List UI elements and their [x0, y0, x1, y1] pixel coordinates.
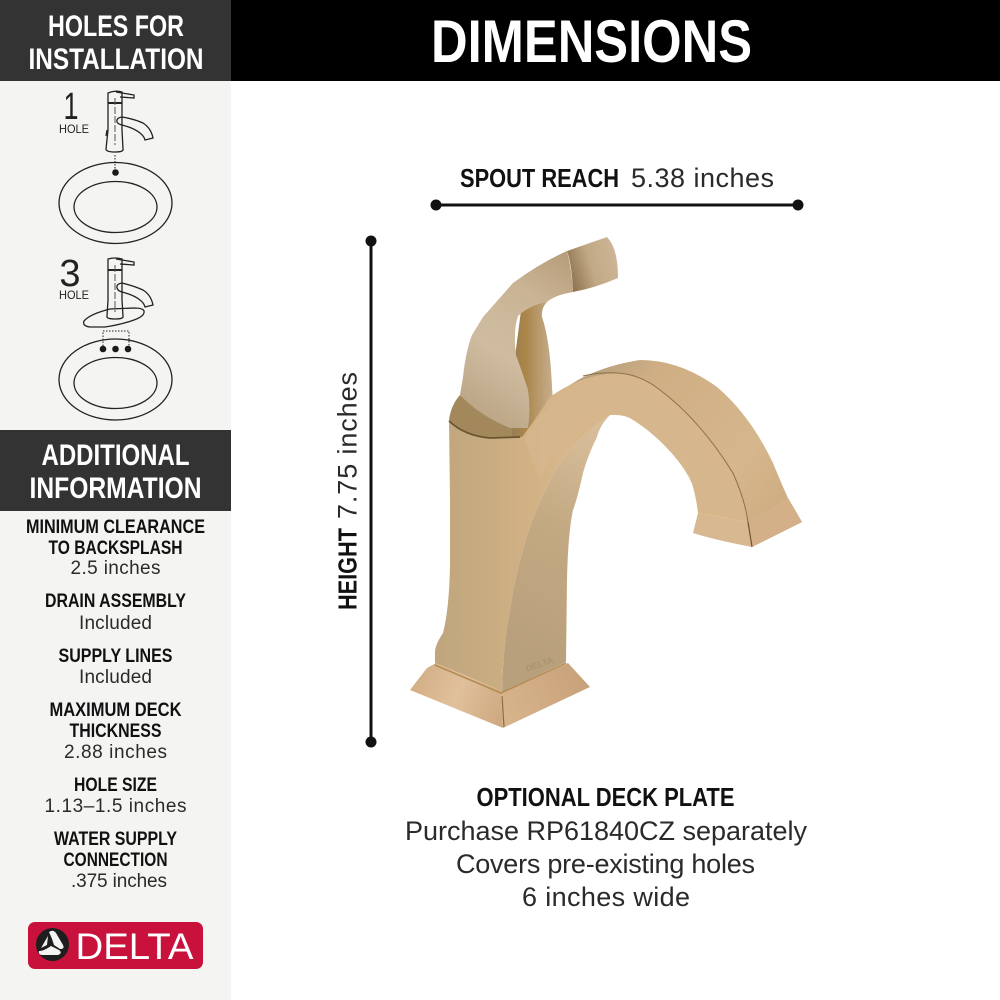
header: holes for installation	[0, 0, 231, 81]
header: holes for installation: HOLES FOR	[48, 10, 184, 43]
diagram: 3 hole	[59, 253, 172, 420]
icon: line faucet with deck plate	[84, 258, 153, 327]
header: additional information: INFORMATION	[30, 472, 202, 505]
dimension: spout reach: SPOUT REACH	[460, 163, 619, 193]
spec: water supply connection: CONNECTION	[64, 850, 168, 871]
logo: delta: DELTA	[76, 926, 194, 967]
header: dimensions: DIMENSIONS	[431, 8, 752, 75]
spec: minimum clearance	[26, 517, 205, 579]
spec: water supply connection: WATER SUPPLY	[54, 829, 177, 850]
spec: hole size	[44, 775, 186, 817]
icon: sink with one hole	[59, 155, 172, 244]
note: optional deck plate	[405, 782, 808, 912]
label: 1 hole	[59, 86, 89, 136]
dimension: height	[332, 236, 376, 748]
label: 3 hole: HOLE	[59, 288, 89, 302]
spec: maximum deck thickness: 2.88 inches	[64, 742, 167, 763]
spec: maximum deck thickness: MAXIMUM DECK	[50, 700, 182, 721]
body and spout front face	[435, 373, 748, 692]
diagram: 1 hole	[59, 86, 172, 244]
collar	[449, 395, 525, 440]
header: dimensions	[231, 0, 1000, 81]
deck base plate left	[410, 663, 503, 728]
label: 3 hole	[59, 253, 89, 302]
spec: water supply connection	[54, 829, 177, 892]
header: holes for installation: INSTALLATION	[28, 43, 204, 76]
spec: supply lines	[58, 646, 172, 688]
left panel background	[0, 0, 231, 1000]
label: 3 hole: 3	[59, 253, 81, 295]
spec: maximum deck thickness: THICKNESS	[70, 721, 162, 742]
spec: hole size: HOLE SIZE	[74, 775, 157, 796]
logo: delta	[28, 922, 203, 969]
spec: drain assembly: Included	[79, 613, 152, 634]
note: optional deck plate: 6 inches wide	[522, 882, 690, 912]
deck base plate right	[501, 663, 590, 728]
note: optional deck plate: Covers pre-existing holes	[456, 849, 755, 879]
spec: drain assembly	[45, 591, 186, 634]
front/back arch edge	[583, 373, 752, 547]
handle lever	[460, 251, 573, 428]
handle neck	[512, 302, 553, 445]
spec: water supply connection: .375 inches	[71, 871, 167, 892]
spec: maximum deck thickness	[50, 700, 182, 763]
spec: hole size: 1.13–1.5 inches	[44, 796, 186, 817]
icon: line faucet	[106, 91, 153, 152]
spec: supply lines: SUPPLY LINES	[58, 646, 172, 667]
body logo text: DELTA	[524, 655, 555, 674]
dimension: height: 7.75 inches	[332, 372, 362, 519]
note: optional deck plate: Purchase RP61840CZ separately	[405, 816, 808, 846]
arch front highlight	[524, 381, 738, 515]
header: additional information	[0, 430, 231, 511]
spout tip	[693, 513, 752, 547]
spec: drain assembly: DRAIN ASSEMBLY	[45, 591, 186, 612]
spout back face	[560, 360, 802, 547]
collar shadow line	[449, 421, 520, 438]
spec: supply lines: Included	[79, 667, 152, 688]
dimension: spout reach	[430, 163, 804, 210]
dimension: height: HEIGHT	[332, 528, 362, 610]
spec: minimum clearance: MINIMUM CLEARANCE	[26, 517, 205, 538]
spec: minimum clearance: TO BACKSPLASH	[48, 538, 182, 559]
note: optional deck plate: OPTIONAL DECK PLATE	[476, 782, 734, 812]
handle tip	[567, 237, 618, 292]
label: 1 hole: HOLE	[59, 122, 89, 136]
icon: sink with three holes	[59, 331, 172, 420]
header: additional information: ADDITIONAL	[42, 439, 190, 472]
label: 1 hole: 1	[64, 86, 78, 128]
spec: minimum clearance: 2.5 inches	[70, 558, 160, 579]
faucet photo illustration	[410, 237, 802, 728]
dimension: spout reach: 5.38 inches	[631, 163, 774, 193]
body inner side face	[502, 415, 610, 692]
